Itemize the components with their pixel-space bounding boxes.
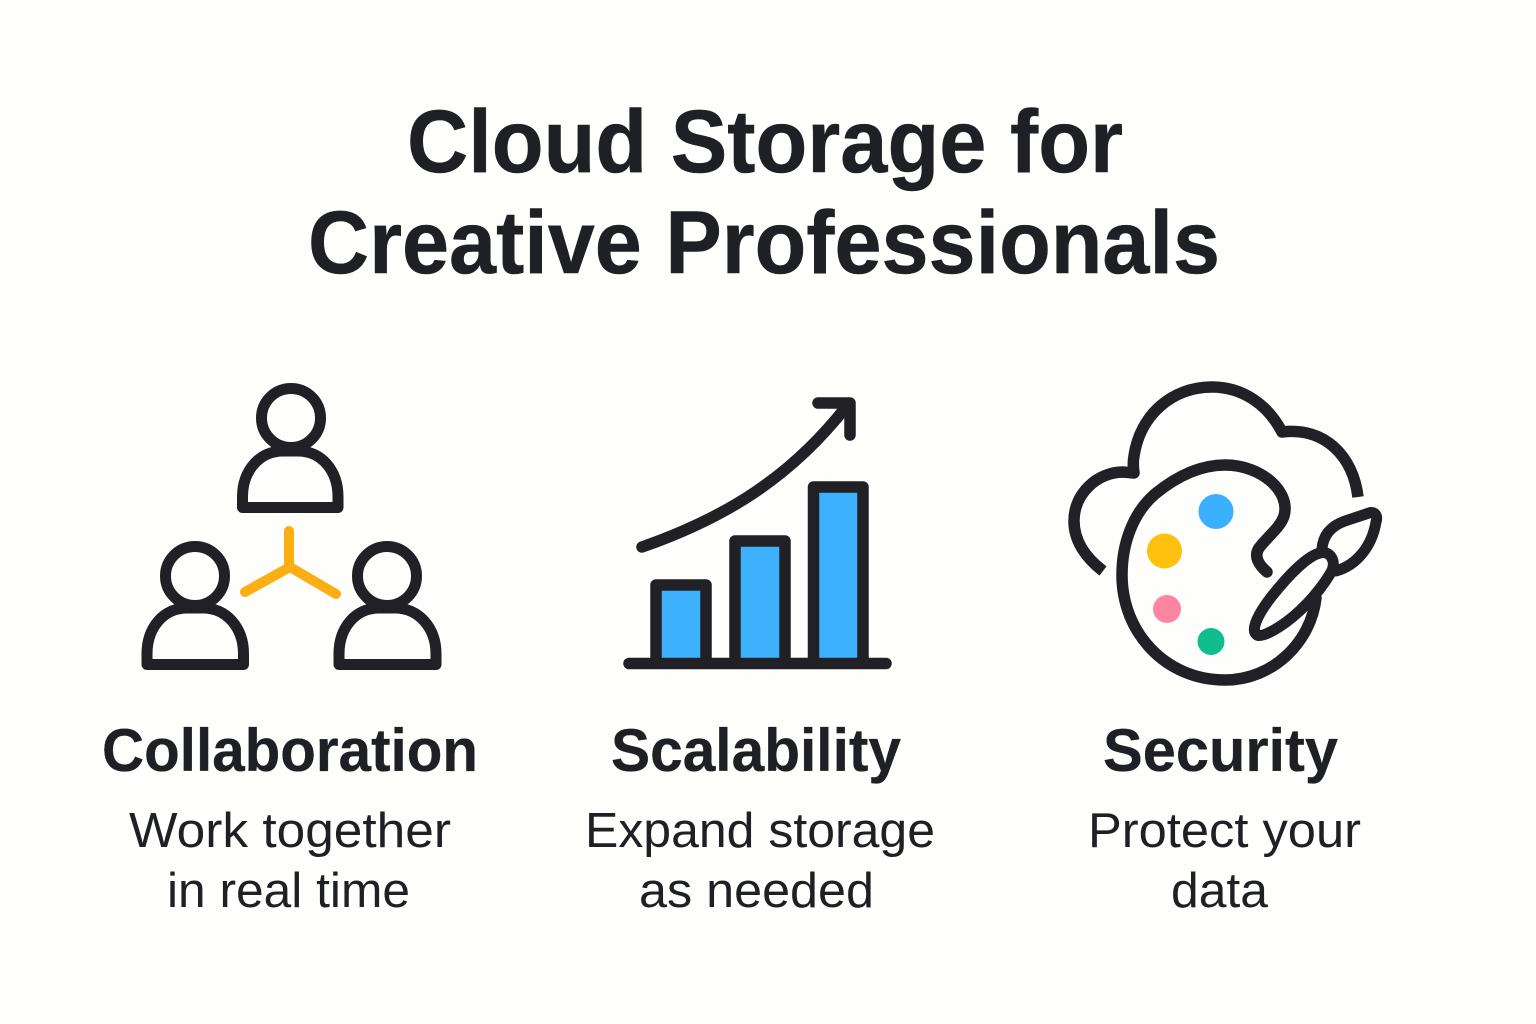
description: security: Protect your	[1088, 803, 1361, 858]
cloud outline	[1074, 387, 1358, 571]
title: Creative Professionals	[308, 192, 1220, 292]
description: security: data	[1171, 863, 1268, 918]
description: scalability	[585, 803, 935, 918]
icon: cloud with palette and brush	[1074, 387, 1377, 680]
title: Cloud Storage for	[407, 91, 1123, 191]
panel: collaboration	[102, 388, 478, 918]
panel: security	[1074, 387, 1377, 918]
paint brush	[1254, 513, 1377, 636]
description: collaboration	[129, 803, 451, 918]
description: scalability: as needed	[639, 863, 874, 918]
paint dots	[1147, 494, 1234, 655]
heading: Security: Security	[1103, 717, 1339, 784]
description: collaboration: in real time	[167, 863, 410, 918]
description: security	[1088, 803, 1361, 918]
panel: scalability	[585, 403, 935, 918]
heading: Collaboration: Collaboration	[102, 717, 478, 784]
description: collaboration: Work together	[129, 803, 451, 858]
heading: Scalability: Scalability	[611, 717, 902, 784]
title	[308, 91, 1220, 292]
description: scalability: Expand storage	[585, 803, 935, 858]
palette outline	[1122, 465, 1316, 680]
icon: rising bar chart	[629, 403, 886, 664]
icon: three connected people	[147, 388, 436, 664]
